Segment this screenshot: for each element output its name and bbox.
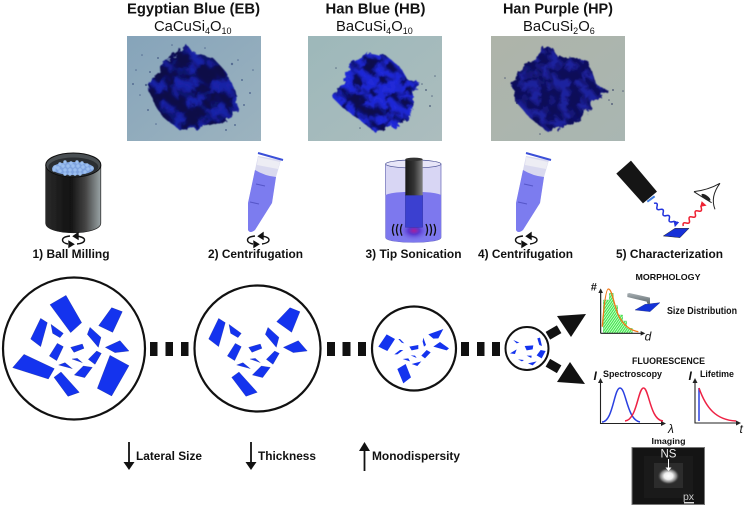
step 4: centrifugation [478,153,573,261]
label: ball milling: 1) Ball Milling [32,247,110,261]
formula: BaCuSi2O6: O [578,19,590,35]
indicator: thickness decreases [246,442,316,470]
icon: rotation arrows [248,233,269,247]
circle: nanosheets after tip sonication [372,306,456,390]
image: fluorescence micrograph [632,448,704,504]
label: characterization: 5) Characterization [616,247,723,261]
icon: light source, sample and eye [616,161,720,238]
label: centrifugation: 4) Centrifugation [478,247,573,261]
icon: centrifuge tube [248,153,283,232]
connector: dashes 1 [150,342,188,356]
label: spectroscopy: Spectroscopy [603,369,663,380]
label: size distribution: Size Distribution [667,306,737,317]
photo: Han Blue powder [308,36,442,141]
panel: Egyptian Blue sample [127,2,261,141]
heading: Han Purple: Han Purple (HP) [503,2,613,18]
heading: Egyptian Blue: Egyptian Blue (EB) [127,2,260,18]
icon: AFM cantilever on nanosheet [627,293,660,312]
label: lifetime: Lifetime [700,369,734,380]
photo: Han Purple powder [491,36,625,141]
arrow: to morphology [546,314,586,340]
formula: BaCuSi4O10: 10 [403,26,413,36]
formula: BaCuSi2O6: 2 [573,26,578,36]
heading: fluorescence: FLUORESCENCE [632,356,705,367]
indicator: lateral size decreases [124,442,202,470]
chart: fluorescence lifetime decay: I [688,369,692,383]
chart: size distribution histogram: d [645,330,652,344]
step 2: centrifugation [208,153,303,261]
indicator: thickness decreases: Thickness [258,451,316,463]
icon: milling jar [46,153,101,233]
panel: Han Blue sample [308,2,442,141]
formula: CaCuSi4O10: CaCuSi [154,19,205,35]
photo: Egyptian Blue powder [127,36,261,141]
image: fluorescence micrograph: NS [661,448,677,460]
chart: emission spectra [594,369,674,436]
image: fluorescence micrograph: px [683,491,695,503]
connector: dashes 3 [461,342,500,356]
panel: fluorescence [594,356,744,504]
chart: fluorescence lifetime decay: t [740,422,744,436]
step 1: ball milling [32,153,110,261]
icon: rotation arrows [516,233,537,247]
label: centrifugation: 2) Centrifugation [208,247,303,261]
formula: BaCuSi2O6: 6 [590,26,595,36]
arrow: to fluorescence [546,359,585,384]
icon: centrifuge tube [516,153,551,232]
label: imaging: Imaging [652,436,686,446]
formula: BaCuSi4O10: 4 [386,26,391,36]
chart: emission spectra: λ [667,422,674,436]
chart: size distribution histogram [591,281,652,344]
formula: CaCuSi4O10: 4 [205,26,210,36]
formula: BaCuSi2O6: BaCuSi [523,19,573,35]
chart: fluorescence lifetime decay [688,369,744,436]
connector: dashes 2 [327,342,366,356]
chart: size distribution histogram: # [591,281,598,293]
formula: CaCuSi4O10: 10 [222,26,232,36]
heading: Han Blue: Han Blue (HB) [326,2,426,18]
icon: sonicator beaker [386,158,441,242]
label: tip sonication: 3) Tip Sonication [366,247,462,261]
circle: initial large nanosheets [3,278,145,420]
circle: final small nanosheets [506,327,548,370]
heading: morphology: MORPHOLOGY [636,272,701,282]
step 5: characterization [616,161,723,261]
indicator: monodispersity increases: Monodispersity [372,451,461,463]
formula: CaCuSi4O10: O [210,19,222,35]
chart: emission spectra: I [594,369,598,383]
icon: rotation arrows [62,233,84,247]
step 3: tip sonication [366,158,462,261]
formula: BaCuSi4O10: BaCuSi [336,19,386,35]
panel: morphology [591,272,737,344]
panel: Han Purple sample [491,2,625,141]
circle: nanosheets after centrifugation [194,286,320,412]
indicator: monodispersity increases [359,442,461,471]
indicator: lateral size decreases: Lateral Size [136,451,202,463]
formula: BaCuSi4O10: O [391,19,403,35]
